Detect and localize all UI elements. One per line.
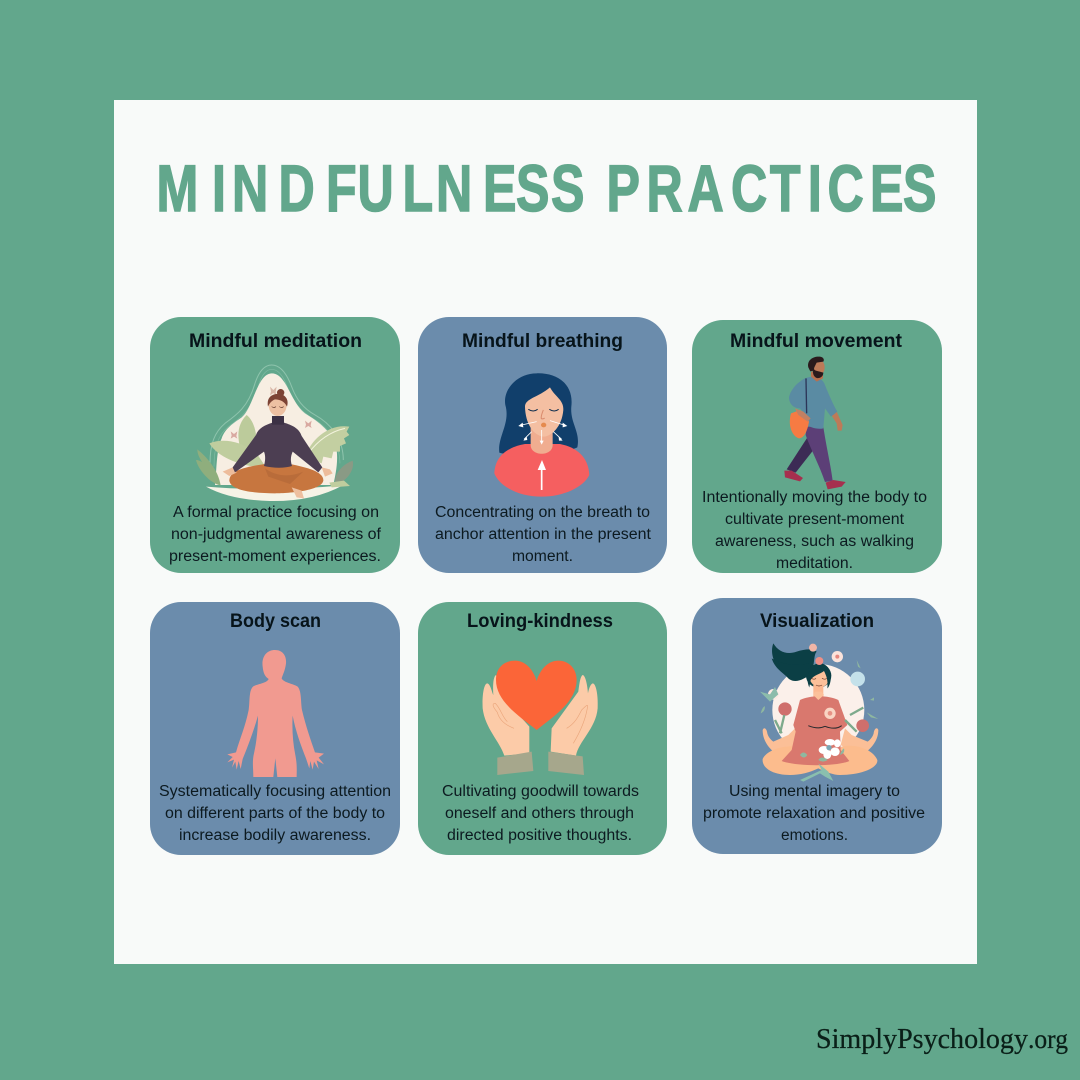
description: mindful movement: awareness, such as walking <box>715 533 914 550</box>
icon: hands holding heart <box>483 661 598 775</box>
description: body scan: on different parts of the body to <box>165 805 385 822</box>
footer: site credit: .org <box>1028 1024 1068 1054</box>
icon: meditating woman <box>196 365 353 501</box>
description: visualization <box>703 783 925 844</box>
description: mindful breathing: anchor attention in the present <box>435 526 652 543</box>
heading: mindful meditation: Mindful meditation <box>189 330 362 352</box>
title <box>156 152 936 226</box>
description: mindful movement: meditation. <box>776 555 853 572</box>
description: mindful meditation <box>169 504 382 565</box>
icon: walking man <box>784 357 846 489</box>
panel: visualization <box>692 598 942 854</box>
description: loving-kindness: directed positive thoughts. <box>447 827 632 844</box>
description: body scan <box>159 783 391 844</box>
panel: loving-kindness <box>418 602 667 855</box>
description: visualization: Using mental imagery to <box>729 783 900 800</box>
description: mindful movement: Intentionally moving the body to <box>702 489 927 506</box>
description: mindful meditation: non-judgmental awareness of <box>171 526 382 543</box>
description: mindful breathing <box>435 504 652 565</box>
panel: body scan <box>150 602 400 855</box>
panel: mindful breathing <box>418 317 667 573</box>
icon: body silhouette <box>227 650 324 777</box>
heading: loving-kindness: Loving-kindness <box>467 610 613 632</box>
footer: site credit: SimplyPsychology <box>816 1023 1028 1055</box>
white content panel <box>114 100 977 964</box>
icon: woman breathing <box>494 373 589 497</box>
heading: body scan: Body scan <box>230 610 321 632</box>
description: mindful meditation: present-moment experiences. <box>169 548 381 565</box>
heading: mindful movement: Mindful movement <box>730 330 902 352</box>
panel: mindful meditation <box>150 317 400 573</box>
description: mindful breathing: Concentrating on the breath to <box>435 504 650 521</box>
icon: woman with flowers <box>760 643 878 782</box>
description: body scan: increase bodily awareness. <box>179 827 371 844</box>
description: loving-kindness <box>442 783 639 844</box>
heading: mindful breathing: Mindful breathing <box>462 330 623 352</box>
title: PRACTICES <box>606 152 936 226</box>
heading: visualization: Visualization <box>760 610 874 632</box>
title: MINDFULNESS <box>156 152 584 226</box>
description: mindful meditation: A formal practice focusing on <box>173 504 379 521</box>
description: mindful breathing: moment. <box>512 548 573 565</box>
panel: mindful movement <box>692 320 942 573</box>
description: visualization: promote relaxation and positive <box>703 805 925 822</box>
description: loving-kindness: Cultivating goodwill towards <box>442 783 639 800</box>
description: body scan: Systematically focusing attention <box>159 783 391 800</box>
description: loving-kindness: oneself and others through <box>445 805 634 822</box>
description: mindful movement <box>702 489 927 572</box>
description: visualization: emotions. <box>781 827 848 844</box>
description: mindful movement: cultivate present-moment <box>725 511 905 528</box>
